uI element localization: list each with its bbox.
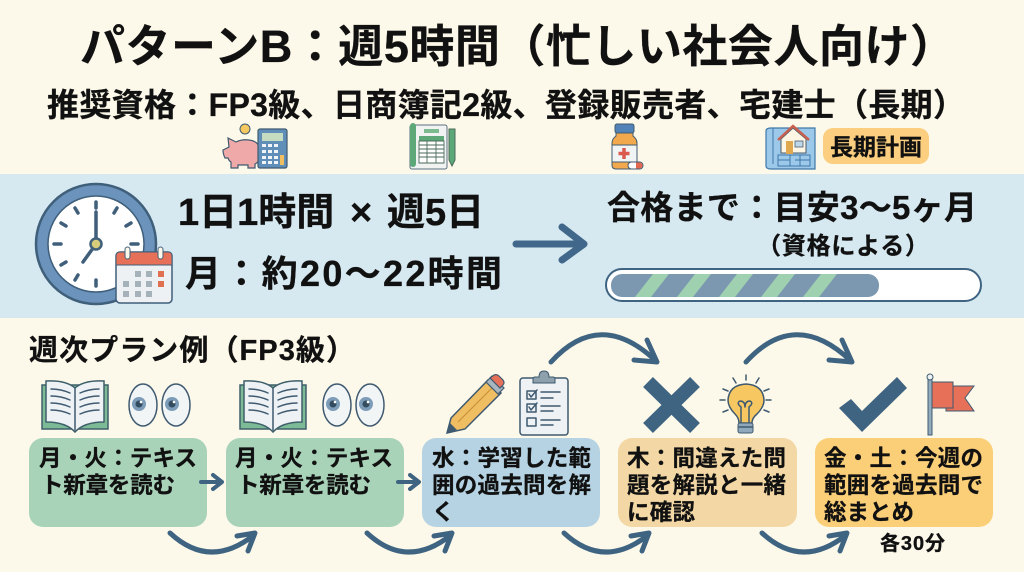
icon: open book 2	[240, 381, 306, 432]
text: daily hours: ×	[350, 192, 372, 234]
panel: time summary	[0, 174, 1024, 318]
step box: Mon Tue	[29, 438, 207, 527]
icon: check mark	[839, 377, 907, 432]
icon: open book 1	[42, 381, 108, 432]
arrow: step 2 to 3	[398, 475, 419, 489]
text: depends on qualification: （資格による）	[757, 233, 929, 260]
icon: checklist clipboard	[520, 371, 568, 435]
note: 30 minutes each: 各30分	[880, 531, 945, 555]
step box: Wednesday: 囲の過去問を解	[432, 473, 591, 498]
step box: Mon Tue: ト新章を読む	[41, 473, 175, 498]
step box: Mon Tue: 月・火：テキス	[39, 446, 197, 471]
step box: Mon Tue (second): 月・火：テキス	[235, 446, 393, 471]
step box: Mon Tue (second)	[226, 438, 404, 527]
progress bar	[606, 269, 981, 301]
step box: Wednesday: 水：学習した範	[432, 446, 591, 471]
text: daily hours: 週5日	[387, 192, 484, 234]
icon: piggy bank and calculator	[223, 124, 287, 168]
icon: eyes 2	[323, 384, 384, 426]
step box: Friday Saturday: 金・土：今週の	[824, 446, 983, 471]
step box: Friday Saturday: 総まとめ	[824, 500, 914, 525]
badge: long-term plan	[823, 128, 929, 164]
icon: calendar	[116, 247, 172, 303]
icon: clock	[36, 184, 156, 304]
arrow: step 1 to 2	[201, 475, 222, 489]
arrow: curve below 3	[564, 533, 649, 552]
text: time to pass: 合格まで：目安3～5ヶ月	[607, 189, 977, 226]
icon: eyes 1	[129, 384, 190, 426]
icon: ledger	[410, 123, 455, 169]
arrow: curve below 1	[170, 533, 255, 552]
text: monthly hours: 月：約20～22時間	[185, 253, 502, 294]
arrow: curve above 3	[551, 335, 657, 362]
icon: pencil	[447, 375, 504, 433]
step box: Thursday	[618, 438, 797, 527]
icon: light bulb	[720, 375, 771, 433]
step box: Friday Saturday: 範囲を過去問で	[824, 473, 983, 498]
step box: Friday Saturday	[815, 438, 993, 527]
subtitle: recommended qualifications: 推奨資格：FP3級、日商簿記2級、登録販売者、宅建士（長期）	[47, 87, 965, 123]
icon: X mark	[648, 382, 695, 428]
arrow: curve below 4	[762, 533, 847, 552]
icon: medicine bottle	[612, 124, 643, 169]
step box: Thursday: 題を解説と一緒	[627, 473, 786, 498]
arrow	[516, 227, 584, 260]
title: パターンB：週5時間（忙しい社会人向け）	[80, 21, 955, 72]
icon: house blueprint	[766, 126, 815, 169]
step box: Thursday: 木：間違えた問	[627, 446, 786, 471]
heading: weekly plan: 週次プラン例（FP3級）	[29, 334, 355, 367]
icon: flag	[927, 374, 974, 435]
step box: Thursday: に確認	[627, 500, 695, 525]
badge: long-term plan: 長期計画	[830, 134, 922, 160]
step box: Wednesday	[422, 438, 600, 527]
step box: Wednesday: く	[432, 500, 455, 525]
arrow: curve below 2	[367, 533, 452, 552]
step box: Mon Tue (second): ト新章を読む	[237, 473, 371, 498]
arrow: curve above 4	[746, 335, 852, 362]
text: daily hours: 1日1時間	[178, 192, 334, 234]
